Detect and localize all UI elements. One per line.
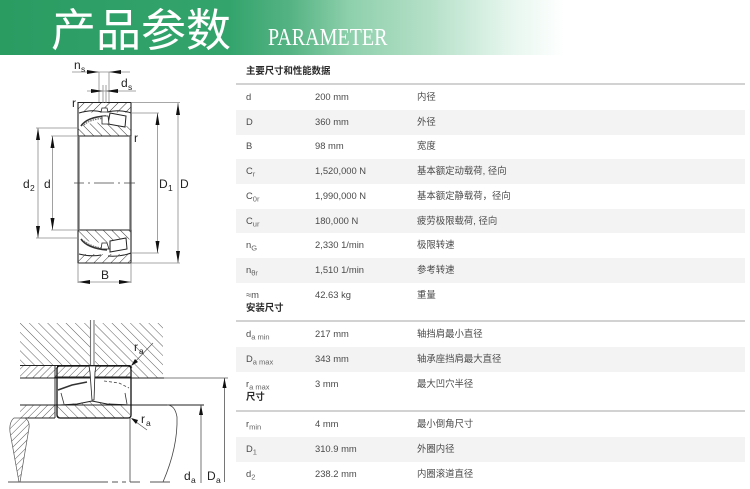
text: 200 mm: [315, 91, 349, 102]
dimension labels: r: [134, 131, 138, 145]
text: 轴承座挡肩最大直径: [417, 353, 501, 364]
left section: [10, 418, 29, 482]
mounting diagram: a: [216, 475, 221, 485]
dimension labels: 1: [168, 183, 173, 193]
text: 内圈滚道直径: [417, 468, 473, 479]
row n0r: nθr: [246, 264, 258, 278]
upper bearing section: [78, 102, 131, 136]
dimension arrows: [36, 70, 180, 284]
row nG: nG: [246, 239, 257, 252]
mounting diagram: a: [139, 346, 144, 356]
header banner: [0, 0, 750, 55]
housing hatch: [20, 323, 163, 378]
row da min: da min: [246, 328, 270, 342]
text: 基本额定动载荷, 径向: [417, 165, 507, 176]
dimension lines: [8, 481, 170, 483]
text: 最大凹穴半径: [417, 378, 473, 389]
text: 98 mm: [315, 140, 344, 151]
dimension labels: D: [159, 177, 168, 191]
text: 42.63 kg: [315, 289, 351, 300]
text: 极限转速: [417, 239, 455, 250]
text: 310.9 mm: [315, 443, 357, 454]
text: 238.2 mm: [315, 468, 357, 479]
text: 参考转速: [417, 264, 455, 275]
dimension labels: r: [72, 96, 76, 110]
dimension labels: d: [121, 76, 128, 90]
shaft shoulder: [130, 405, 177, 482]
row m: ≈m: [246, 289, 259, 300]
mounting diagram: a: [146, 418, 151, 428]
row d2: d2: [246, 468, 255, 482]
dimension labels: d: [44, 177, 51, 191]
dimension labels: [23, 58, 189, 282]
row d: d: [246, 91, 251, 102]
text: 宽度: [417, 140, 436, 151]
row D: D: [246, 116, 253, 127]
centre line: [74, 182, 135, 184]
dimension labels: B: [101, 268, 109, 282]
text: 180,000 N: [315, 215, 358, 226]
bearing cross-section diagram: [8, 58, 228, 485]
dimension labels: 2: [30, 183, 35, 193]
heading: dimensions: 尺寸: [246, 391, 265, 402]
dimension labels: D: [180, 177, 189, 191]
row D1: D1: [246, 443, 257, 456]
text: 1,520,000 N: [315, 165, 366, 176]
mounting diagram: r: [141, 412, 145, 426]
text: 外圈内径: [417, 443, 455, 454]
dimension lines: [36, 72, 180, 283]
row C0r: C0r: [246, 190, 259, 204]
lower bearing section: [78, 230, 131, 263]
text: 基本额定静载荷，径向: [417, 190, 511, 201]
oil hole: [90, 318, 95, 366]
text: 360 mm: [315, 116, 349, 127]
text: 轴挡肩最小直径: [417, 328, 483, 339]
mounting diagram: a: [191, 475, 196, 485]
bearing outlines: [20, 366, 164, 378]
row Cur: Cur: [246, 215, 259, 228]
mounting diagram: D: [207, 469, 216, 483]
mounting diagram: d: [184, 469, 191, 483]
spec table: [236, 60, 750, 489]
row ra max: ra max: [246, 378, 270, 392]
text: 外径: [417, 116, 436, 127]
table heading: main dimensions: 主要尺寸和性能数据: [246, 65, 330, 76]
text: 4 mm: [315, 418, 338, 429]
text: 内径: [417, 91, 436, 102]
text: 1,510 1/min: [315, 264, 364, 275]
row Da max: Da max: [246, 353, 273, 366]
subtitle: PARAMETER: [268, 25, 388, 51]
labels: r: [134, 340, 138, 354]
text: 343 mm: [315, 353, 349, 364]
row r min: rmin: [246, 418, 261, 432]
dimension labels: s: [128, 82, 132, 92]
bore lines: [78, 136, 130, 230]
dimension labels: d: [23, 177, 30, 191]
text: 最小倒角尺寸: [417, 418, 473, 429]
text: 2,330 1/min: [315, 239, 364, 250]
dimension labels: n: [74, 58, 81, 72]
text: 1,990,000 N: [315, 190, 366, 201]
row B: B: [246, 140, 252, 151]
row Cr: Cr: [246, 165, 255, 178]
text: 疲劳极限载荷, 径向: [417, 215, 497, 226]
text: 217 mm: [315, 328, 349, 339]
mounting diagram: [8, 318, 228, 485]
heading: mounting dimensions: 安装尺寸: [246, 302, 284, 313]
text: 重量: [417, 289, 436, 300]
text: 3 mm: [315, 378, 338, 389]
dimension labels: s: [81, 64, 85, 74]
